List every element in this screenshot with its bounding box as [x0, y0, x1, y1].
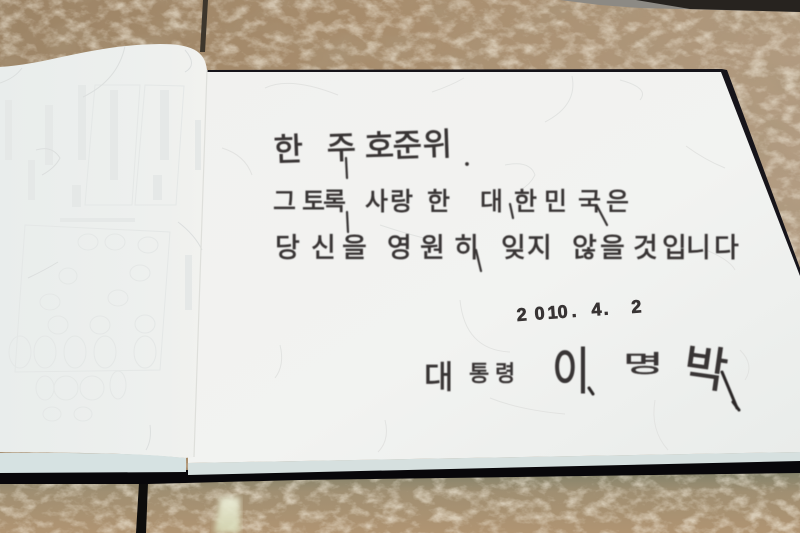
- table seam: bottom divider: [136, 483, 148, 533]
- signature: president Lee Myung-bak: [424, 340, 739, 410]
- title: 대: [424, 359, 453, 395]
- book cover: black binding: [0, 69, 800, 484]
- right page: [188, 72, 800, 475]
- left page: [0, 44, 207, 473]
- marble table: bottom: [0, 470, 800, 533]
- surname: 이: [552, 343, 590, 400]
- signature tails: [589, 372, 739, 410]
- given name 2: 박: [680, 340, 731, 399]
- line 1: 한주호준위: [273, 126, 453, 168]
- table seam: top gap and far edge: [200, 0, 800, 52]
- page stack: left: [0, 453, 186, 473]
- page stack: right: [188, 452, 800, 475]
- date: 2010.4.2: [516, 296, 642, 325]
- page fold shadow: [194, 70, 207, 457]
- handwritten message: [273, 126, 739, 271]
- given name 1: 명: [623, 350, 663, 377]
- line 2: 그토록사랑한대한민국은: [273, 188, 629, 216]
- show-through columns on left page: [5, 85, 201, 310]
- glare on table: [214, 497, 240, 533]
- paper fibres: right page: [222, 76, 749, 452]
- paper fibres: left page: [0, 46, 202, 450]
- title continued: 통령: [469, 361, 515, 386]
- handwriting tails: [346, 158, 607, 271]
- show-through print on left page: [9, 85, 184, 421]
- line 1 period: [466, 162, 468, 166]
- line 3: 당신을영원히잊지않을것입니다: [275, 233, 739, 263]
